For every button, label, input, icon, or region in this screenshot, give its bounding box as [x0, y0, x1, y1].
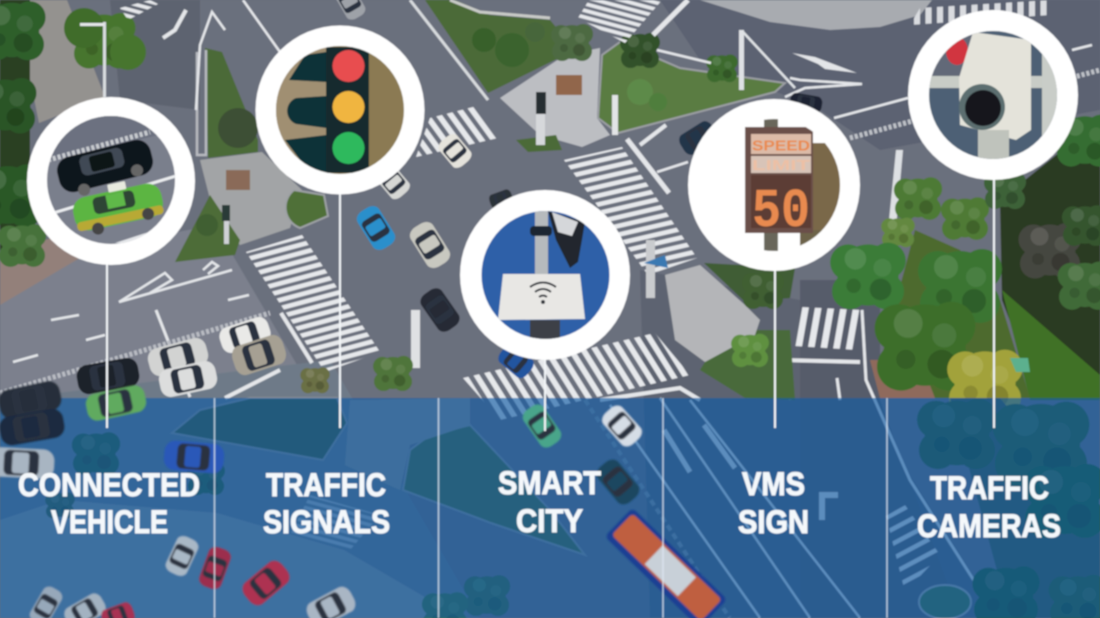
- pole: [764, 118, 778, 252]
- label: traffic signals: [263, 467, 390, 540]
- circle: VMS sign: [688, 99, 860, 271]
- connector lines: [107, 178, 994, 431]
- circle: traffic signals: [256, 26, 424, 194]
- camera lens: [959, 84, 1005, 130]
- sign body: [745, 127, 813, 233]
- right trees: [830, 115, 1100, 618]
- pole: [535, 209, 548, 279]
- label: smart city: [498, 465, 601, 539]
- circle: connected vehicle: [27, 97, 195, 265]
- label: VMS sign: [738, 466, 809, 540]
- centre left island and plaza: [175, 48, 328, 262]
- signal side visors: [289, 52, 326, 82]
- wifi sign: [498, 274, 585, 320]
- label: smart city: SMART: [498, 465, 601, 501]
- camera housing: [959, 32, 1031, 140]
- signal head: [326, 47, 369, 173]
- label: traffic cameras: CAMERAS: [917, 508, 1061, 544]
- label: VMS sign: VMS: [742, 466, 805, 502]
- vehicles in band: [0, 379, 727, 618]
- lower islands and pavements: [0, 263, 795, 618]
- black car: [56, 139, 154, 196]
- tree behind sign: [813, 143, 840, 247]
- poles and signals: [222, 92, 903, 395]
- camera pole: [978, 130, 1009, 165]
- label: traffic cameras: [917, 470, 1061, 544]
- label: connected vehicle: VEHICLE: [51, 504, 168, 540]
- trees: [45, 272, 784, 618]
- vehicles above band: [75, 0, 823, 399]
- circle: VMS sign: SPEED: [752, 138, 810, 154]
- label: smart city: CITY: [516, 503, 583, 539]
- left pavement and trees: [0, 0, 146, 305]
- circle: smart city: [460, 190, 630, 360]
- circle: traffic cameras: [908, 10, 1078, 180]
- circle: VMS sign: 50: [752, 180, 810, 243]
- label: VMS sign: SIGN: [738, 504, 809, 540]
- green taxi: [72, 180, 164, 236]
- bus: [605, 508, 727, 618]
- top right island and plaza: [598, 0, 932, 133]
- label: connected vehicle: [18, 467, 200, 540]
- seam lines: [214, 398, 887, 618]
- label: traffic signals: TRAFFIC: [266, 467, 386, 503]
- blue overlay band: [0, 398, 1100, 618]
- label: connected vehicle: CONNECTED: [18, 467, 200, 503]
- lamp: [548, 211, 585, 268]
- label: traffic signals: SIGNALS: [263, 504, 390, 540]
- top centre island and plaza: [410, 0, 610, 152]
- circle: VMS sign: LIMIT: [752, 157, 810, 174]
- label: traffic cameras: TRAFFIC: [930, 470, 1049, 506]
